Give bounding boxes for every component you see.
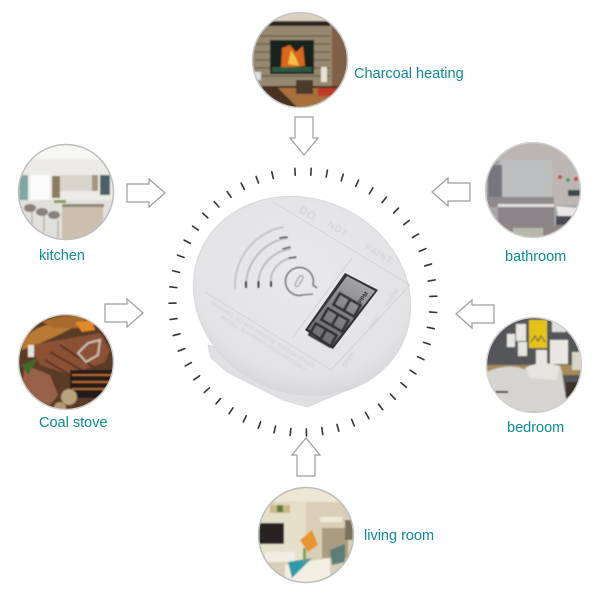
label: bedroom: bedroom [507,420,564,436]
engraved text: CLOSE [385,287,401,307]
tick ring [169,168,437,436]
photo: coal stove grill [18,314,114,410]
photo border [486,318,582,412]
engraved text: SAFE [368,315,382,331]
label: bathroom: bathroom [505,249,566,265]
arrow: right lower [456,300,494,328]
engraved text [209,204,401,373]
label: Charcoal heating: Charcoal heating [354,66,464,82]
engraved text: INSTALL IN A VENTILATED AREA ONLY [219,315,308,373]
engraved seams [205,202,410,370]
arrow: left upper [127,179,165,207]
photo border [18,144,114,240]
photo: bathroom [484,140,584,240]
arrow: right upper [432,178,470,206]
photo border [258,488,354,582]
arrow: bottom [292,438,320,476]
detector body [160,161,444,431]
photo: kitchen [18,144,114,240]
LCD unit: PPM [358,291,370,305]
test button [285,267,317,295]
photo: living room [258,486,354,584]
engraved text: NOT [326,219,350,239]
sound vent arcs [235,227,296,288]
label: kitchen: kitchen [39,248,85,264]
detector lower tabs [208,345,345,407]
arrow: top [290,117,318,155]
label: living room: living room [364,528,434,544]
carbon monoxide detector [160,161,444,431]
engraved text: DO [296,204,319,224]
arrow: left lower [105,299,143,327]
LCD digits [309,293,361,347]
label: Coal stove: Coal stove [39,415,108,431]
photo border [18,314,114,410]
photo border [252,12,348,108]
photo border [486,142,580,238]
engraved text: OPEN [342,352,356,369]
LCD display [305,273,378,349]
photo: bedroom [484,315,584,415]
engraved text: WARNING: DO NOT REMOVE SENSOR COVER [209,301,316,370]
photo: charcoal heating fireplace [252,12,348,108]
engraved text: PAINT [363,242,395,266]
